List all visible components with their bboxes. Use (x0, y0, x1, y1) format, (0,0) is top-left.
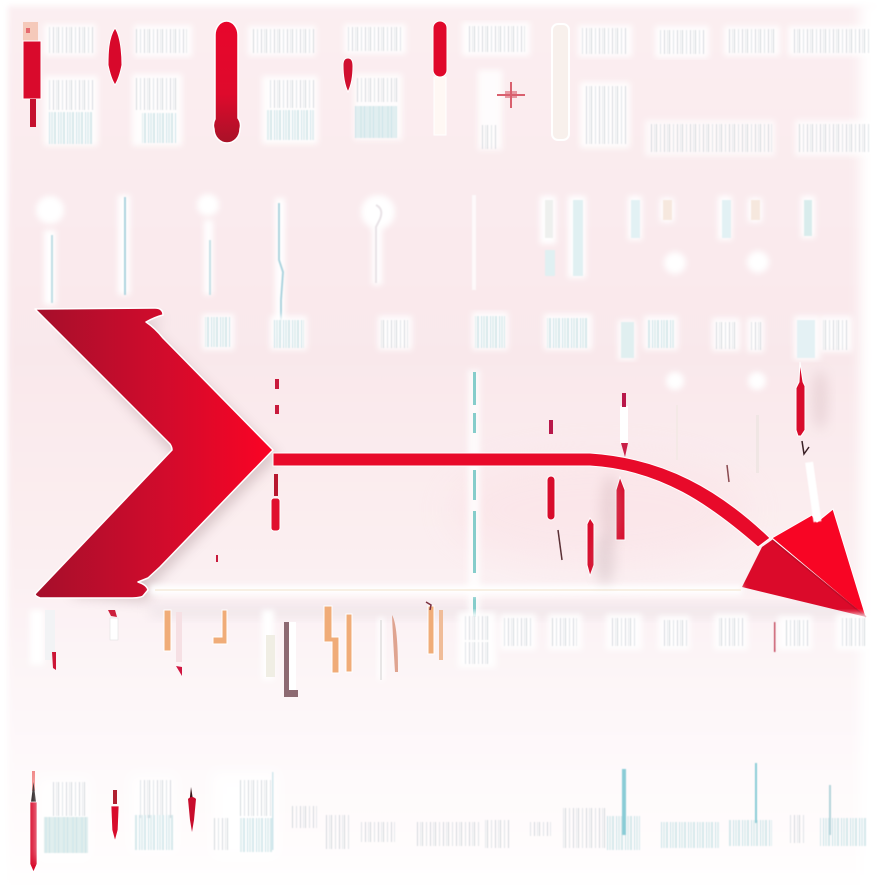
icon: red cross (497, 82, 525, 108)
icon: ivory tube (552, 24, 569, 140)
teal dashed vertical line (468, 370, 480, 620)
icon: bottom red chili (188, 787, 196, 832)
icon: red thermometer (213, 21, 240, 143)
lower right labels (458, 612, 872, 668)
icon: small red drop (343, 58, 353, 92)
bottom row text marks (38, 763, 868, 860)
icon: red lens drop (108, 28, 122, 85)
small red markers on arrow (216, 362, 828, 585)
lower left hanging bars (30, 602, 443, 697)
upper thin pointers with glow (36, 194, 815, 340)
icon: top red tube (23, 22, 41, 127)
red arrowhead (742, 509, 866, 617)
red curved arrow shaft (273, 453, 770, 547)
top row text blocks (44, 22, 876, 58)
white baseline (150, 585, 742, 595)
icon: bottom red pen (30, 771, 37, 872)
second row text blocks (44, 70, 873, 156)
icon: red and ivory capsule (433, 21, 447, 135)
large red chevron (35, 308, 278, 602)
middle row labels (202, 312, 852, 360)
ivory connector near arrowhead (805, 462, 821, 522)
icon: bottom red capsule (111, 790, 119, 841)
